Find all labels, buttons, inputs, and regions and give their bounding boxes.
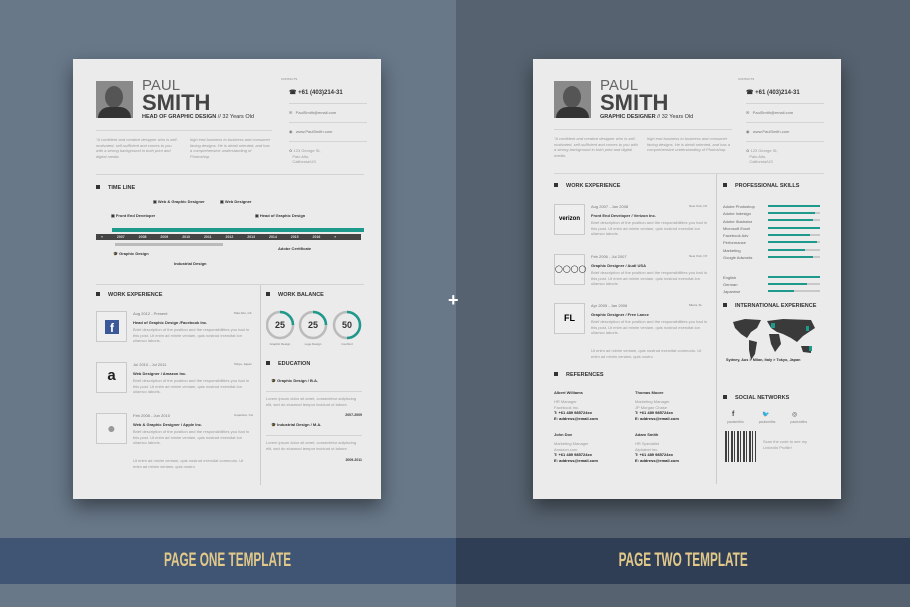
references (554, 372, 679, 462)
social networks: paulsmiths paulsmiths paulsmiths (727, 420, 807, 424)
contacts: ✿ 123 George St, (746, 148, 778, 153)
references: Marketing Manager (554, 441, 588, 446)
work item audi: New York, NY (689, 254, 708, 258)
professional skills: German (723, 282, 737, 287)
references: E: address@email.com (635, 458, 679, 462)
contacts: ◉ www.PaulSmith.com (746, 129, 789, 134)
work item verizon: Front End Developer / Verizon Inc. (591, 213, 656, 218)
banner left: PAGE ONE TEMPLATE (164, 550, 292, 571)
professional skills: Marketing (723, 248, 741, 253)
panel: page two: SMITH (600, 90, 668, 115)
background right (456, 0, 910, 607)
work item 2: Brief description of the position and the responsibilities you had in this post. Ut enim ad minim veniam, quis nostrud exercitat ion ullamco laboris. (133, 378, 249, 394)
professional skills: Adobe Illustrator (723, 219, 752, 224)
contacts: CONTACTS (738, 77, 754, 81)
references: Adam Smith (635, 432, 658, 437)
timeline heading: TIME LINE (108, 185, 135, 191)
work item 2 (96, 362, 252, 394)
work balance: 25 (308, 320, 318, 330)
plus sign: + (448, 290, 459, 310)
contacts: ✉ PaulSmith@email.com (746, 110, 793, 115)
timeline: ▣ Head of Graphic Design (255, 213, 305, 218)
professional skills: Google Adwords (723, 255, 752, 260)
work balance: Coohtml (341, 342, 353, 346)
references: T: +61 489 985724xx (554, 452, 592, 457)
name: PAUL (600, 77, 638, 94)
name: PAUL (142, 77, 180, 94)
work item freelance: FL (564, 313, 575, 323)
quote: "A confident and creative designer who is self-motivated, self-sufficient and comes to you with a strong background in both print and digital media. (554, 136, 638, 158)
professional skills: Japanese (723, 289, 740, 294)
international experience: INTERNATIONAL EXPERIENCE (735, 303, 816, 309)
panel: page one (73, 59, 381, 499)
timeline: ▣ Web Designer (220, 199, 252, 204)
work item 1: Brief description of the position and the responsibilities you had in this post. Ut enim ad minim veniam, quis nostrud exercitat ion ullamco laboris. (133, 327, 249, 343)
international experience (723, 303, 816, 362)
contacts: Palo Alto, (292, 154, 309, 158)
education: 🎓 Industrial Design / M.A. (271, 422, 321, 427)
references: Albert Williams (554, 390, 583, 395)
education: EDUCATION (278, 361, 310, 367)
professional skills: Performance (723, 240, 746, 245)
work item freelance: Apr 2005 - Jan 2006 (591, 303, 627, 308)
education: 2009-2011 (345, 458, 362, 462)
contacts: California/US (749, 159, 773, 164)
work item audi (554, 254, 708, 286)
professional skills: PROFESSIONAL SKILLS (735, 183, 799, 189)
panel: page two (533, 59, 841, 499)
references: HR Manager (554, 399, 577, 404)
professional skills: Adobe Indesign (723, 211, 751, 216)
work item 3: Web & Graphic Designer / Apple Inc. (133, 422, 202, 427)
references: HR Specialist (635, 441, 659, 446)
panel: page one: SMITH (142, 90, 210, 115)
work balance (266, 292, 362, 346)
references: E: address@email.com (554, 458, 598, 462)
references: E: address@email.com (554, 416, 598, 420)
banner left (0, 538, 456, 584)
photo (554, 81, 591, 118)
social networks (723, 395, 807, 462)
timeline: Adobe Certificate (278, 246, 311, 251)
work item freelance (554, 303, 707, 359)
work balance: 50 (342, 320, 352, 330)
contacts: ✿ 123 George St, (289, 148, 321, 153)
references: Facebook Inc. (554, 404, 579, 410)
contacts (281, 77, 367, 164)
work item freelance: Ut enim ad minim veniam, quis nostrud exercitat commodo. Ut enim ad minim veniam, quis nostru (591, 348, 701, 358)
work item 3: Cupertino, CA (234, 413, 253, 417)
social networks: 🐦 (762, 412, 769, 418)
work item verizon (554, 204, 708, 236)
banner right: PAGE TWO TEMPLATE (618, 550, 748, 571)
work item 3: Feb 2008 - Jun 2010 (133, 413, 170, 418)
timeline: Industrial Design (174, 261, 206, 266)
work item 3: Ut enim ad minim veniam, quis nostrud exercitat commodo. Ut enim ad minim veniam, quis nostru (133, 458, 243, 468)
work item 2: Web Designer / Amazon Inc. (133, 371, 186, 376)
work item 2: a (107, 367, 116, 384)
work item verizon: Brief description of the position and the responsibilities you had in this post. Ut enim ad minim veniam, quis nostrud exercitat ion ullamco laboris. (591, 220, 707, 236)
work item audi: Feb 2006 - Jul 2007 (591, 254, 627, 259)
professional skills: Microsoft Excel (723, 226, 750, 231)
contacts: CONTACTS (281, 77, 297, 81)
social networks: f (732, 411, 734, 418)
references: Thomas Moore (635, 390, 663, 395)
professional skills: Adobe Photoshop (723, 204, 755, 209)
panel: page one: high end business to business and consumer facing designs. He is detail oriented, and has a comprehensive understanding of Photoshop. (190, 137, 270, 158)
work item verizon: verizon (559, 216, 580, 222)
social networks: Scan the code to see my LinkedIn Profile! (763, 439, 807, 450)
education (266, 361, 362, 462)
timeline: « 2007 2008 2009 2010 2011 2012 2013 2014 2015 2016 » (101, 235, 336, 239)
banner right (456, 538, 910, 584)
references: Marketing Manager (635, 399, 669, 404)
education: 2007-2009 (345, 413, 362, 417)
photo (96, 81, 133, 118)
work balance: WORK BALANCE (278, 292, 324, 298)
references: T: +61 489 985724xx (635, 452, 673, 457)
references: T: +61 489 985724xx (554, 410, 592, 415)
work item audi: Graphic Designer / Audi USA (591, 263, 646, 268)
contacts: ☎ +61 (403)214-31 (289, 90, 343, 96)
references: John Doe (554, 432, 572, 437)
social networks: ◎ (792, 412, 797, 418)
professional skills (723, 183, 820, 294)
work item freelance: Graphic Designer / Free Lance (591, 312, 649, 317)
work item 1: Palo Alto, CA (234, 311, 252, 315)
panel: page two: GRAPHIC DESIGNER // 32 Years Old (600, 114, 693, 120)
panel: page two: high end business to business and consumer facing designs. He is detail oriented, and has a comprehensive understanding of Photoshop. (647, 136, 730, 152)
international experience: Sydney, Aus > Milan, Italy > Tokyo, Japan (726, 358, 800, 362)
contacts (738, 77, 824, 164)
social networks: SOCIAL NETWORKS (735, 395, 789, 401)
work item verizon: New York, NY (689, 204, 708, 208)
work item audi: ◯◯◯◯ (555, 266, 586, 273)
work experience heading: WORK EXPERIENCE (566, 183, 620, 189)
work item 2: Tokyo, Japan (234, 362, 252, 366)
panel: page one: HEAD OF GRAPHIC DESIGN // 32 Years Old (142, 114, 254, 120)
work balance: Graphic Design (270, 342, 291, 346)
contacts: Palo Alto, (749, 154, 766, 158)
timeline: ▣ Web & Graphic Designer (153, 199, 205, 204)
timeline (96, 199, 364, 266)
references: JP Morgan Chase (635, 404, 667, 410)
work item 1: Head of Graphic Design /Facebook Inc. (133, 320, 207, 325)
professional skills: English (723, 275, 736, 280)
references: T: +61 489 985724xx (635, 410, 673, 415)
timeline: ▣ Front End Developer (111, 213, 155, 218)
work experience heading: WORK EXPERIENCE (108, 292, 162, 298)
references: REFERENCES (566, 372, 604, 378)
references: Amazon.com (554, 446, 577, 452)
work item freelance: Miami, FL (689, 303, 702, 307)
references: Alphabet Inc. (635, 446, 658, 452)
work item 1 (96, 311, 252, 343)
work item verizon: Aug 2007 - Jan 2008 (591, 204, 628, 209)
education: 🎓 Graphic Design / B.A. (271, 378, 318, 383)
work item freelance: Brief description of the position and the responsibilities you had in this post. Ut enim ad minim veniam, quis nostrud exercitat ion ullamco laboris. (591, 319, 707, 335)
work balance: 25 (275, 320, 285, 330)
work item 2: Jul 2010 - Jul 2011 (133, 362, 167, 367)
professional skills: Facebook Adv (723, 233, 748, 238)
work item 3 (96, 413, 253, 469)
work item 1: Aug 2012 - Present (133, 311, 167, 316)
timeline: 🎓 Graphic Design (113, 251, 149, 256)
quote: "A confident and creative designer who is self-motivated, self-sufficient and comes to you with a strong background in both print and digital media. (96, 137, 178, 158)
contacts: California/US (292, 159, 316, 164)
education: Lorem ipsum dolor sit amet, consectetur adipiscing elit, sed do eiusmod tempor incidunt ut labore. (266, 440, 356, 450)
references: E: address@email.com (635, 416, 679, 420)
work item 3: ● (107, 420, 116, 436)
work item 3: Brief description of the position and the responsibilities you had in this post. Ut enim ad minim veniam, quis nostrud exercitat ion ullamco laboris. (133, 429, 249, 445)
work item audi: Brief description of the position and the responsibilities you had in this post. Ut enim ad minim veniam, quis nostrud exercitat ion ullamco laboris. (591, 270, 707, 286)
contacts: ✉ PaulSmith@email.com (289, 110, 336, 115)
background left (0, 0, 456, 607)
education: Lorem ipsum dolor sit amet, consectetur adipiscing elit, sed do eiusmod tempor incidunt ut labore. (266, 396, 356, 406)
work item 1: f (110, 321, 114, 335)
contacts: ◉ www.PaulSmith.com (289, 129, 332, 134)
contacts: ☎ +61 (403)214-31 (746, 90, 800, 96)
work balance: Logo Design (305, 342, 322, 346)
